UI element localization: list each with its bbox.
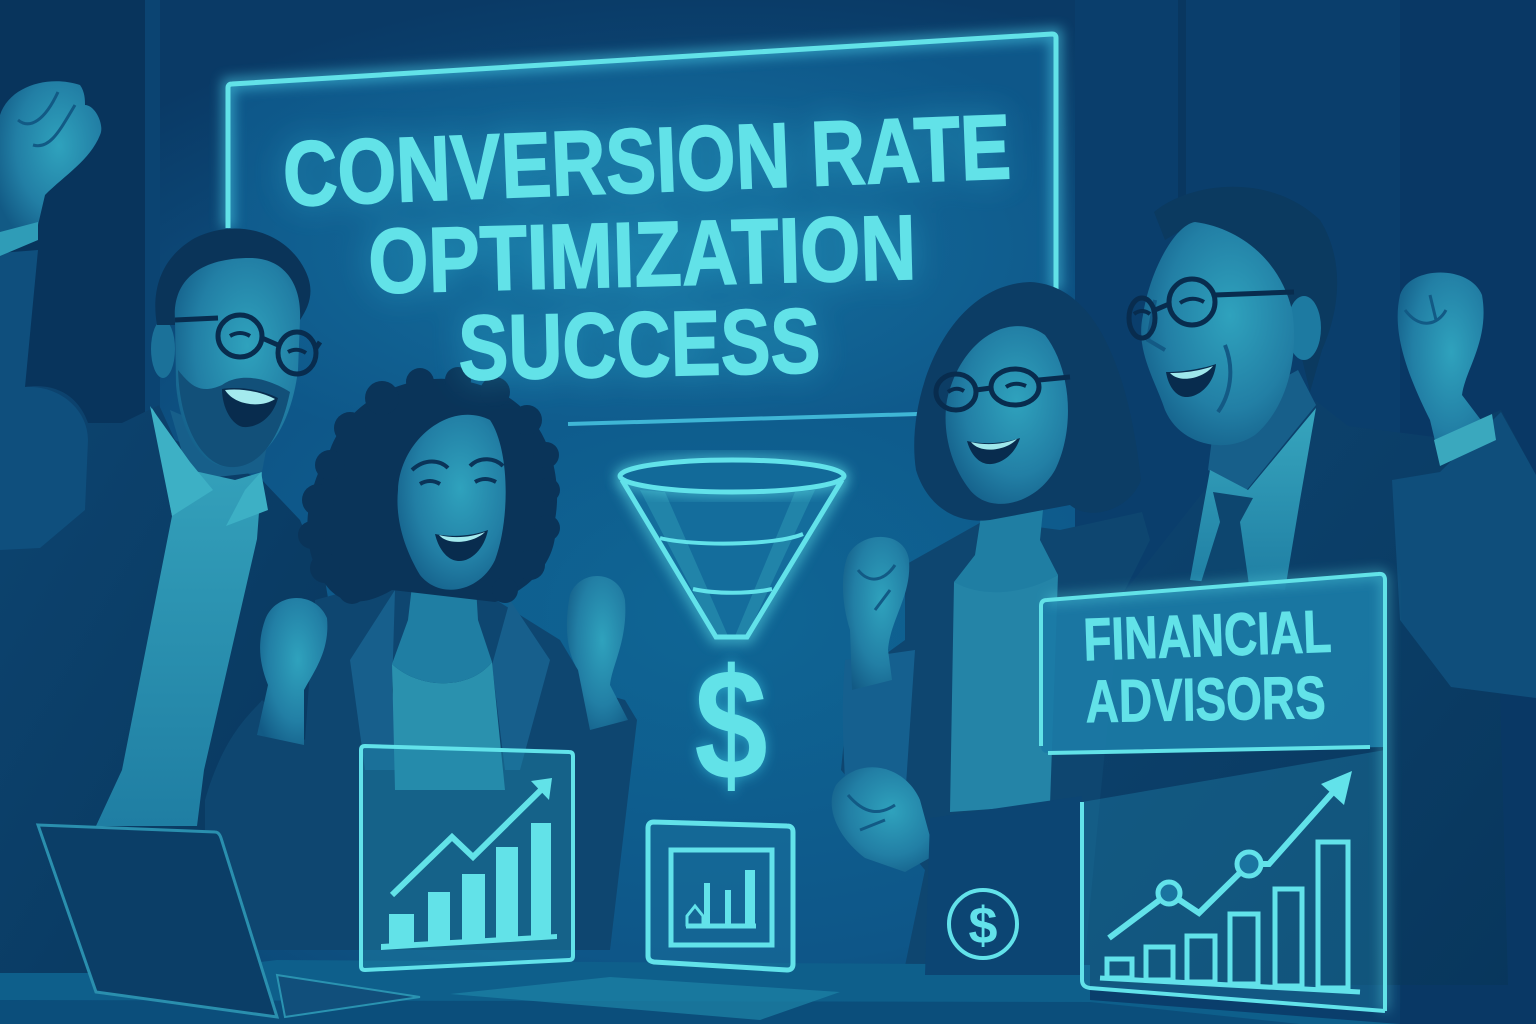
ear	[1287, 296, 1321, 360]
sleeve	[1392, 412, 1536, 698]
sleeve	[843, 650, 915, 800]
mouth	[222, 388, 278, 427]
raised fist	[843, 537, 909, 690]
neck	[170, 410, 268, 480]
knuckle lines	[18, 92, 75, 146]
collar	[150, 406, 268, 526]
mouth	[967, 438, 1020, 464]
icon: dollar coin	[949, 890, 1017, 958]
icon: dollar sign: $	[694, 636, 768, 813]
icon: dollar coin: $	[969, 897, 998, 955]
hair	[914, 282, 1141, 521]
person: woman with bob haircut	[832, 282, 1150, 990]
jacket	[1085, 401, 1536, 985]
laptop	[38, 825, 420, 1017]
lower fist	[832, 767, 935, 872]
cheek and nose shading	[1148, 300, 1230, 412]
cuff	[1434, 414, 1496, 466]
chart panel: growth chart right	[1082, 750, 1385, 1011]
cuff	[0, 222, 38, 256]
right fist	[567, 576, 628, 730]
title: OPTIMIZATION	[367, 197, 917, 313]
chart panel: small centre chart	[648, 822, 793, 970]
person: man on the right with raised fist	[1085, 187, 1536, 985]
chart panel: growth chart left	[361, 746, 573, 970]
title: SUCCESS	[457, 290, 821, 400]
sleeve	[0, 250, 88, 550]
panel: title sign	[228, 34, 1056, 424]
raised fist	[0, 81, 101, 235]
jacket	[841, 512, 1150, 990]
glasses	[936, 369, 1070, 410]
left fist	[257, 598, 327, 745]
tie	[1198, 492, 1253, 592]
teeth	[439, 532, 485, 542]
jacket	[205, 578, 637, 950]
glasses	[175, 315, 320, 374]
face	[175, 258, 300, 467]
icon: dollar sign: $	[694, 636, 768, 813]
neck	[392, 560, 492, 683]
raised fist	[1398, 272, 1490, 462]
table	[0, 960, 1400, 1024]
hair	[1154, 187, 1337, 392]
shirt	[1190, 408, 1316, 590]
title: CONVERSION RATE	[281, 96, 1012, 226]
eyes	[948, 384, 1026, 392]
teeth	[971, 439, 1017, 450]
teeth	[225, 389, 275, 404]
ear	[151, 320, 175, 378]
mouth	[435, 530, 488, 561]
jacket	[0, 386, 345, 990]
face	[946, 326, 1068, 504]
teeth	[1170, 366, 1213, 379]
top	[950, 575, 1058, 812]
curly hair	[298, 367, 560, 604]
knuckle lines	[858, 565, 895, 610]
sign label: FINANCIAL	[1082, 598, 1332, 673]
title: SUCCESS	[457, 290, 821, 400]
dark device with coin	[925, 796, 1082, 975]
eyes	[1134, 299, 1204, 314]
glasses	[1129, 279, 1294, 338]
lapels	[350, 590, 550, 770]
person: man on the left with raised fist	[0, 81, 345, 990]
top	[392, 662, 505, 790]
mouth	[1166, 364, 1216, 397]
funnel icon	[620, 460, 844, 637]
knuckle lines	[848, 795, 895, 830]
neck	[954, 490, 1058, 592]
shirt	[96, 408, 262, 826]
hair	[155, 228, 310, 325]
person: woman with curly hair	[205, 367, 637, 950]
sign label: ADVISORS	[1085, 664, 1326, 735]
face	[1141, 222, 1294, 445]
beard	[178, 370, 290, 467]
knuckle lines	[1405, 295, 1446, 323]
panel: financial advisors sign	[1041, 574, 1385, 1011]
title: OPTIMIZATION	[367, 197, 917, 313]
sign label	[1082, 598, 1332, 735]
neck	[1208, 370, 1316, 492]
eyes and brows	[412, 459, 503, 484]
face	[397, 415, 506, 590]
title: CONVERSION RATE	[281, 96, 1012, 226]
eyes	[230, 333, 306, 353]
title	[281, 96, 1012, 400]
